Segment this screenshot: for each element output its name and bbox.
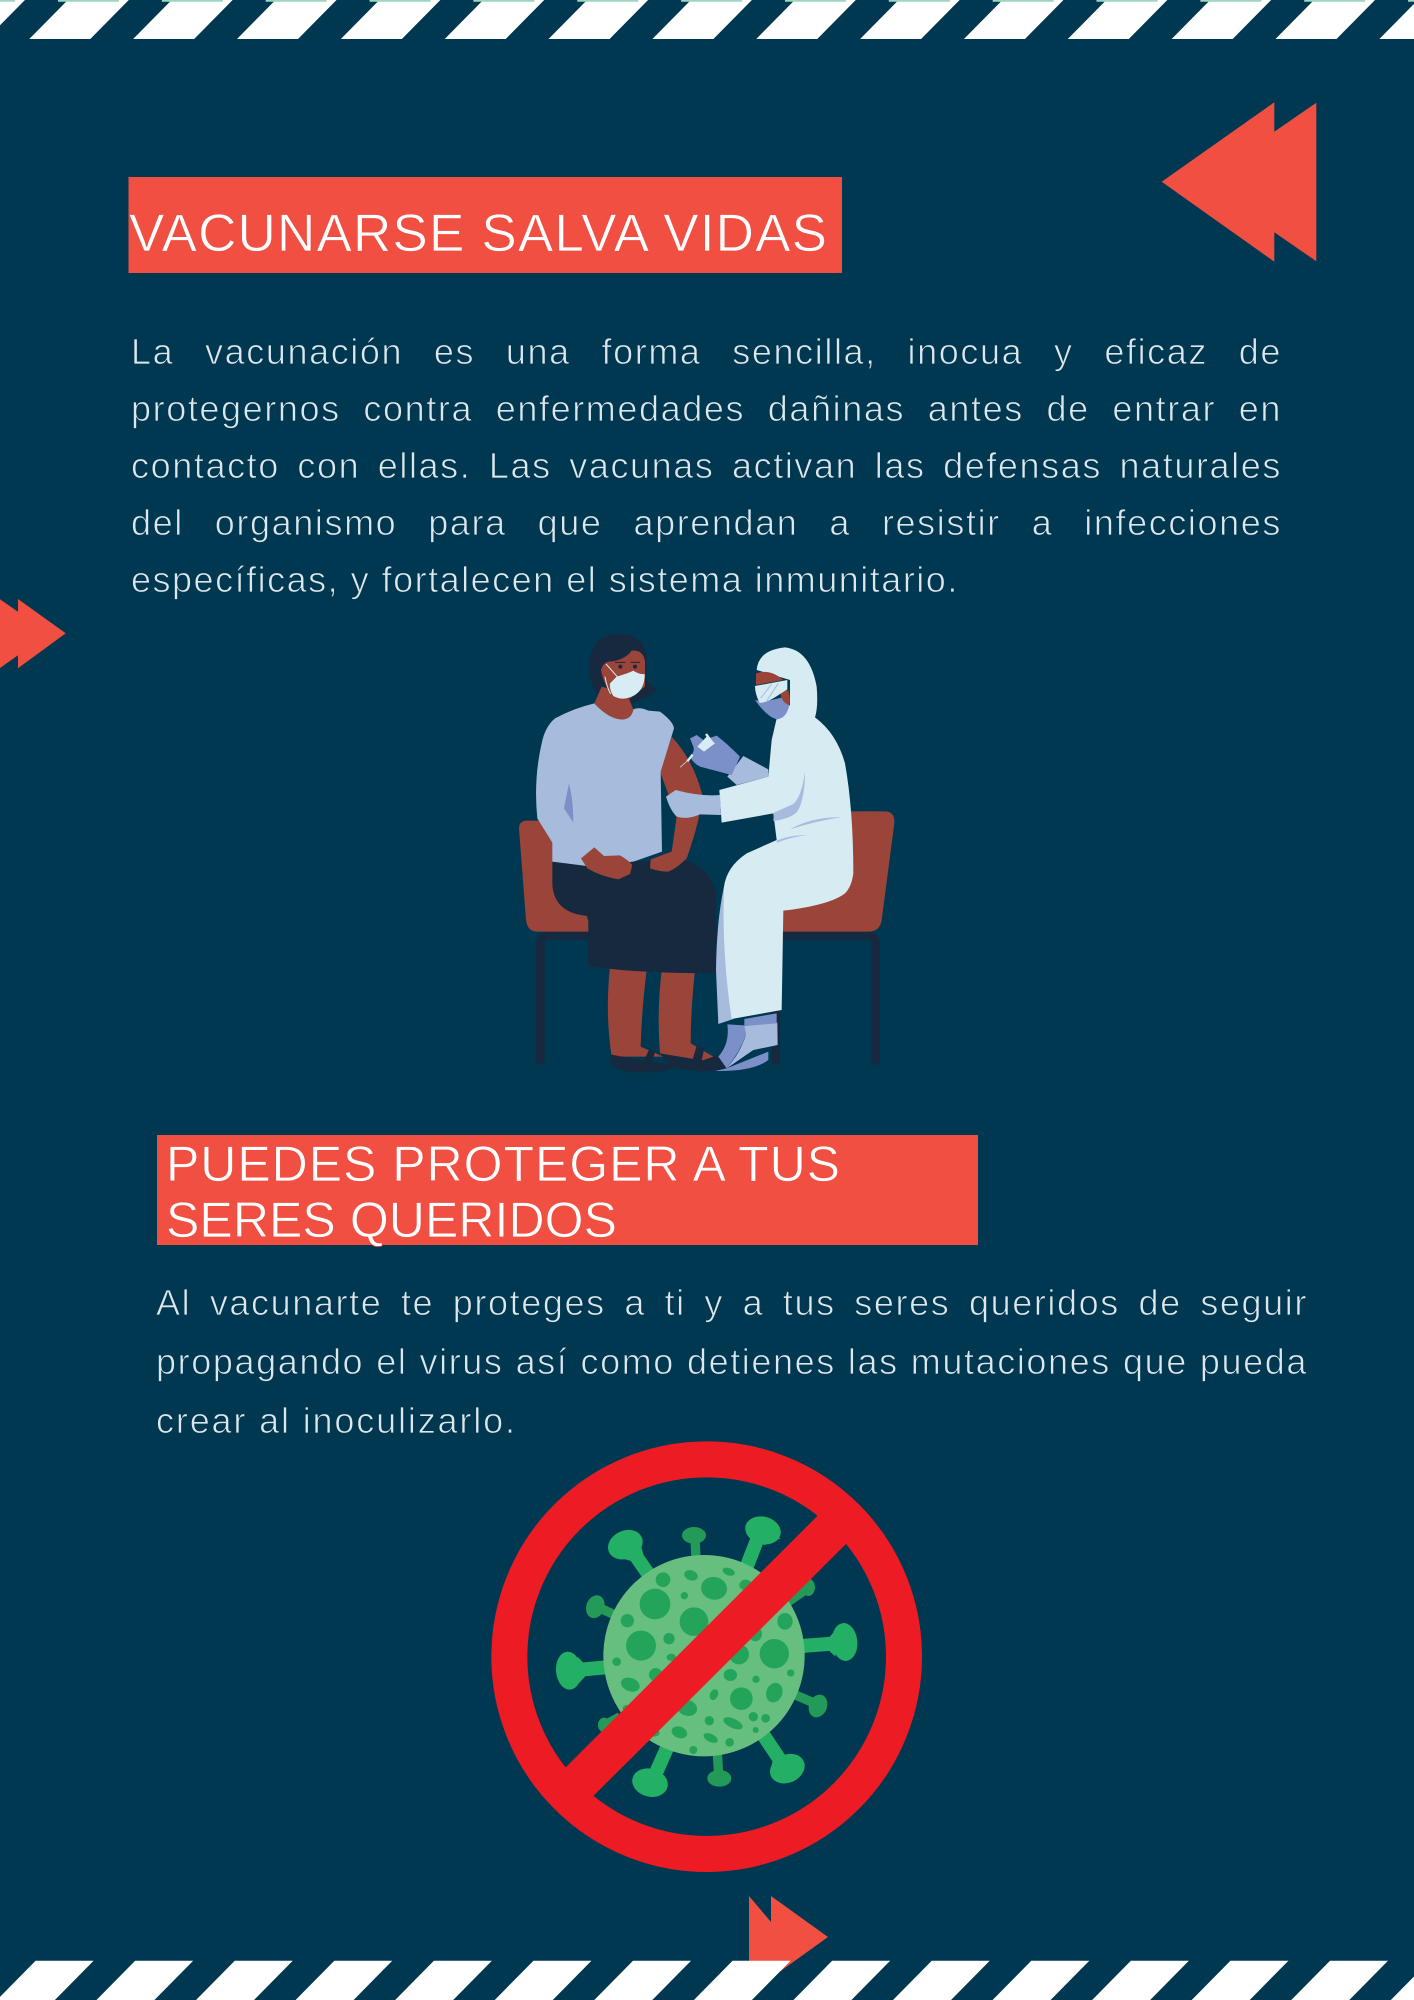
text block: protect loved ones paragraph: Al vacunarte te proteges a ti y a tus seres queridos de seguir <box>156 1282 1308 1323</box>
heading: puedes proteger a tus seres queridos <box>157 1135 978 1248</box>
top hazard stripes <box>0 0 1414 39</box>
icon: virus in prohibition sign <box>509 1459 904 1854</box>
illustration: vaccination scene <box>519 634 894 1072</box>
text block: protect loved ones paragraph <box>156 1282 1308 1441</box>
arrow: left edge double right-pointing <box>0 599 66 668</box>
text block: protect loved ones paragraph: propagando el virus así como detienes las mutaciones que pueda <box>156 1341 1308 1382</box>
text block: intro paragraph: protegernos contra enfermedades dañinas antes de entrar en <box>131 388 1282 429</box>
text block: intro paragraph: del organismo para que aprendan a resistir a infecciones <box>131 502 1282 543</box>
text block: intro paragraph: La vacunación es una forma sencilla, inocua y eficaz de <box>131 331 1282 372</box>
flares joining heads to stems <box>577 1530 837 1788</box>
text block: intro paragraph: específicas, y fortalecen el sistema inmunitario. <box>131 559 959 600</box>
text block: protect loved ones paragraph: crear al inoculizarlo. <box>156 1400 517 1441</box>
arrow: top right double left-pointing <box>1162 102 1316 262</box>
text block: intro paragraph <box>131 331 1282 600</box>
heading: puedes proteger a tus seres queridos: SERES QUERIDOS <box>166 1192 617 1248</box>
bottom hazard stripes <box>0 1961 1414 2000</box>
chair <box>519 811 894 1061</box>
patient <box>536 634 726 1072</box>
heading: puedes proteger a tus seres queridos: PUEDES PROTEGER A TUS <box>166 1136 840 1192</box>
heading: vacunarse salva vidas <box>128 177 842 273</box>
heading: vacunarse salva vidas: VACUNARSE SALVA VIDAS <box>129 204 827 263</box>
arrow: bottom double right-pointing <box>749 1896 828 1978</box>
prohibition sign <box>509 1459 904 1854</box>
health worker in protective suit <box>666 647 853 1071</box>
virus <box>554 1512 859 1801</box>
text block: intro paragraph: contacto con ellas. Las vacunas activan las defensas naturales <box>131 445 1282 486</box>
